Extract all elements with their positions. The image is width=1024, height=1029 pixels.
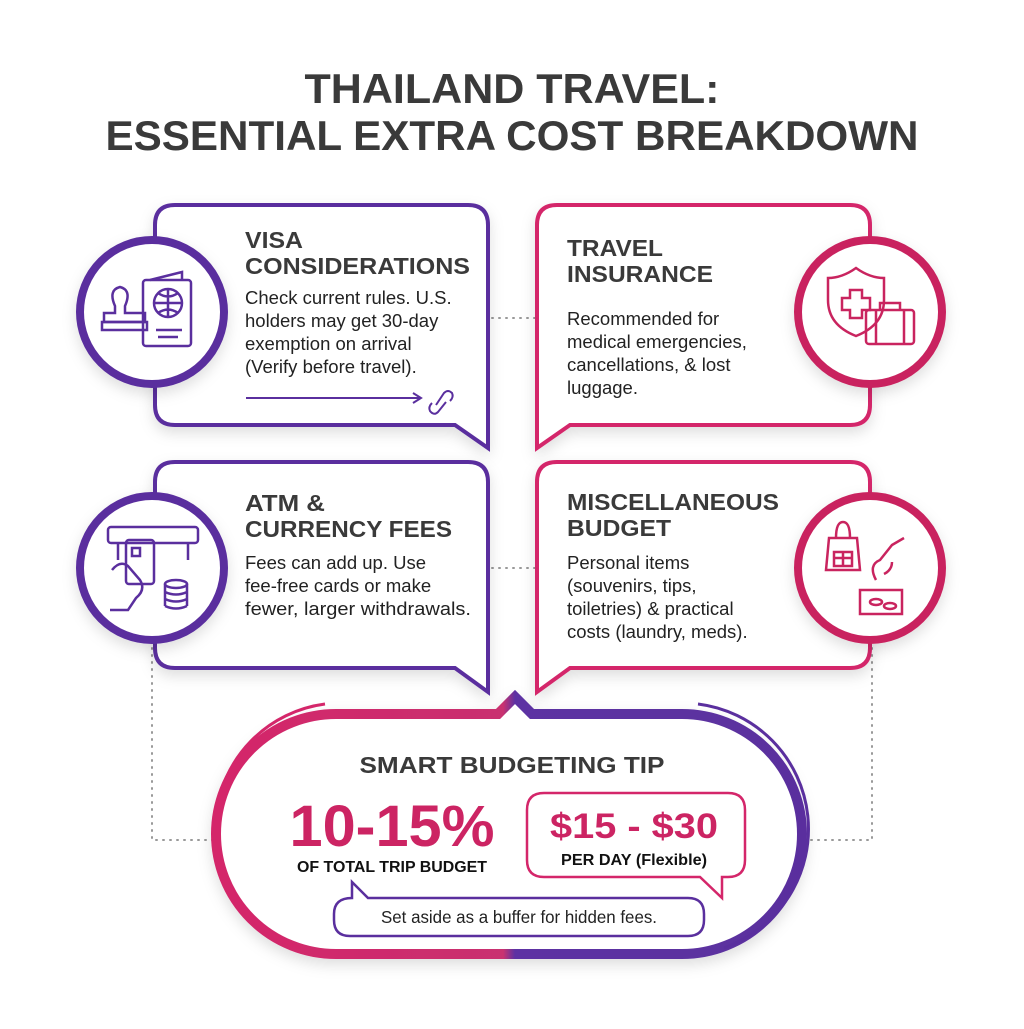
heading: INSURANCE <box>567 261 713 287</box>
callout: per day: $15 - $30 <box>550 807 718 846</box>
panel: miscellaneous budget <box>537 462 942 692</box>
heading: TRAVEL <box>567 235 663 261</box>
panel: atm & currency fees <box>80 462 488 692</box>
arrow and link icon <box>246 391 453 414</box>
big number: 10-15% <box>290 794 494 859</box>
heading <box>245 490 452 542</box>
heading <box>567 489 779 541</box>
body text <box>245 552 471 619</box>
callout: per day: PER DAY (Flexible) <box>561 852 707 869</box>
icon: passport and stamp <box>80 240 224 384</box>
body text: fewer, larger withdrawals. <box>245 598 471 619</box>
body text: holders may get 30-day <box>245 310 439 331</box>
body text: toiletries) & practical <box>567 598 734 619</box>
callout: buffer note: Set aside as a buffer for hidden fees. <box>381 907 657 927</box>
title <box>106 65 918 159</box>
callout: per day <box>527 793 745 898</box>
body text: fee-free cards or make <box>245 575 431 596</box>
body text: Personal items <box>567 552 689 573</box>
body text: medical emergencies, <box>567 331 747 352</box>
dotted connectors <box>152 318 872 840</box>
body text: (souvenirs, tips, <box>567 575 697 596</box>
body text <box>567 308 747 398</box>
icon: shield and suitcase <box>798 240 942 384</box>
heading <box>245 227 470 279</box>
heading: MISCELLANEOUS <box>567 489 779 515</box>
title: ESSENTIAL EXTRA COST BREAKDOWN <box>106 112 918 159</box>
panel: travel insurance <box>537 205 942 448</box>
heading: ATM & <box>245 490 325 516</box>
body text <box>245 287 452 377</box>
heading: SMART BUDGETING TIP <box>360 752 664 778</box>
body text: (Verify before travel). <box>245 356 417 377</box>
body text: Fees can add up. Use <box>245 552 426 573</box>
body text: Recommended for <box>567 308 719 329</box>
body text: cancellations, & lost <box>567 354 731 375</box>
body text: luggage. <box>567 377 638 398</box>
heading: VISA <box>245 227 303 253</box>
panel: visa considerations <box>80 205 488 448</box>
heading: CURRENCY FEES <box>245 516 452 542</box>
caption: OF TOTAL TRIP BUDGET <box>297 859 487 876</box>
heading <box>567 235 713 287</box>
body text: exemption on arrival <box>245 333 412 354</box>
heading: BUDGET <box>567 515 671 541</box>
icon: atm card and coins <box>80 496 224 640</box>
body text: costs (laundry, meds). <box>567 621 748 642</box>
title: THAILAND TRAVEL: <box>304 65 720 112</box>
heading: CONSIDERATIONS <box>245 253 470 279</box>
body text: Check current rules. U.S. <box>245 287 452 308</box>
callout: buffer note <box>334 882 704 936</box>
body text <box>567 552 748 642</box>
panel: smart budgeting tip <box>215 697 808 954</box>
icon: shopping bag and tip jar <box>798 496 942 640</box>
